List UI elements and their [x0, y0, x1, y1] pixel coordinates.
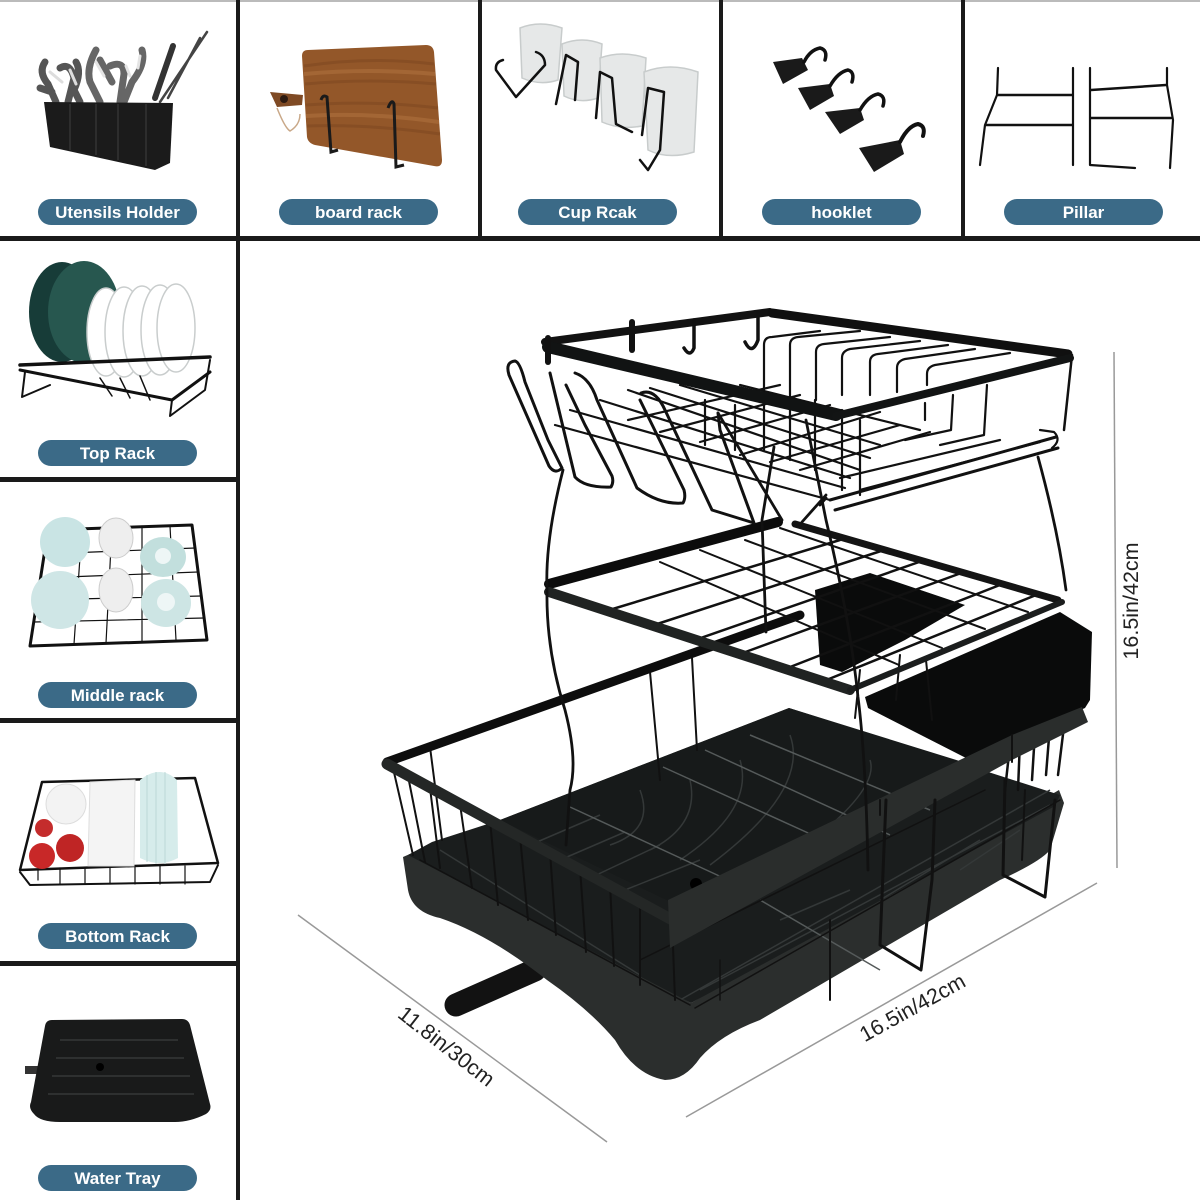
icon: wire basket	[20, 778, 218, 885]
label: Pillar	[1004, 199, 1163, 225]
icon: wire rack	[20, 357, 210, 416]
icon: drain spout	[456, 970, 535, 1005]
icon: hook 2	[798, 70, 853, 110]
label: Bottom Rack: Bottom Rack	[65, 927, 170, 946]
label: Cup Rcak	[518, 199, 677, 225]
dimension: length: 16.5in/42cm	[856, 969, 970, 1047]
label: board rack: board rack	[315, 203, 403, 222]
dimension: width: 11.8in/30cm	[393, 1001, 499, 1092]
icon: cutting board	[270, 45, 442, 167]
icon: hanging wire loops	[508, 361, 754, 523]
icon: utensil caddies	[815, 573, 1092, 758]
top rack frame	[545, 312, 1072, 430]
tray ribs	[440, 735, 1050, 1000]
label: hooklet	[762, 199, 921, 225]
icon: wire cup hangers	[496, 52, 664, 170]
icon: black caddy	[44, 102, 173, 170]
panel: top rack	[20, 261, 210, 466]
dimension: height	[1114, 352, 1143, 868]
top rack floor wires	[555, 385, 1058, 510]
label: Cup Rcak: Cup Rcak	[558, 203, 637, 222]
icon: left pillar	[980, 68, 1073, 165]
label: Water Tray	[38, 1165, 197, 1191]
panel: hooklet	[762, 48, 924, 225]
bottom rack frame	[387, 615, 1088, 948]
label: board rack	[279, 199, 438, 225]
icon: wire grid	[30, 525, 207, 646]
support wires	[547, 413, 1066, 870]
icon: hook 4	[859, 124, 924, 172]
top rack plate dividers	[764, 331, 1010, 445]
icon: tray	[25, 1019, 210, 1122]
icon: dark plates	[29, 261, 120, 363]
dimension: length	[686, 883, 1097, 1117]
bottom rack wires	[393, 655, 1065, 1008]
icon: dishes	[29, 772, 178, 869]
icon: white plates	[87, 284, 195, 377]
label: Utensils Holder: Utensils Holder	[55, 203, 180, 222]
panel: pillar	[980, 68, 1173, 225]
panel: bottom rack	[20, 772, 218, 949]
middle rack frame	[549, 522, 1062, 690]
panel: utensils holder	[38, 32, 207, 225]
panel: water tray	[25, 1019, 210, 1191]
label: Utensils Holder	[38, 199, 197, 225]
middle rack grid	[606, 528, 1041, 681]
dimension: height: 16.5in/42cm	[1119, 542, 1143, 660]
dimension: width	[298, 915, 607, 1142]
label: Top Rack: Top Rack	[80, 444, 156, 463]
icon: top rack hooks	[548, 312, 758, 362]
icon: right pillar	[1090, 68, 1173, 168]
label: Middle rack	[38, 682, 197, 708]
label: Pillar: Pillar	[1063, 203, 1105, 222]
label: Water Tray: Water Tray	[74, 1169, 161, 1188]
label: Middle rack: Middle rack	[71, 686, 165, 705]
icon: feet	[830, 780, 1055, 1000]
icon: hook 3	[825, 94, 884, 134]
panel: board rack	[270, 45, 442, 225]
label: Top Rack	[38, 440, 197, 466]
icon: hook 1	[773, 48, 826, 84]
label: hooklet: hooklet	[811, 203, 872, 222]
icon: cutlery	[40, 32, 207, 102]
panel: assembled dish rack	[387, 312, 1092, 1080]
panel: middle rack	[30, 517, 207, 708]
icon: cups and glasses	[31, 517, 191, 629]
icon: glass cups	[520, 24, 698, 156]
label: Bottom Rack	[38, 923, 197, 949]
icon: drip tray	[403, 708, 1064, 1080]
panel: cup rack	[496, 24, 698, 225]
